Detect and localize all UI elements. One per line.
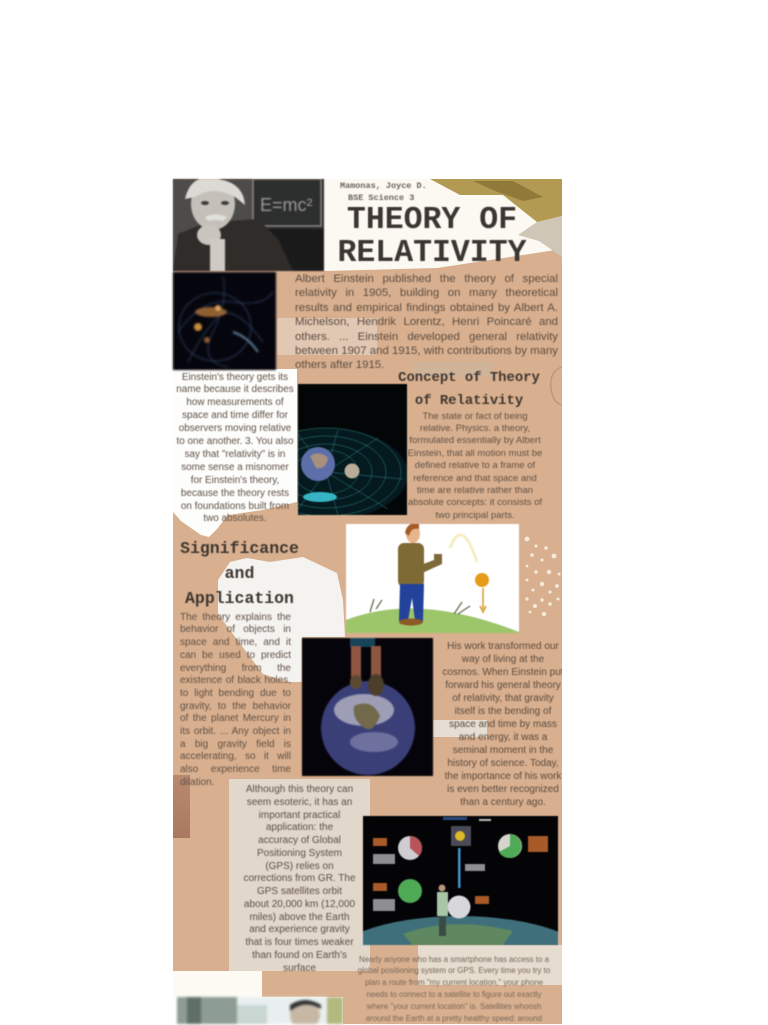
left white panel text: name because it describes (176, 384, 294, 395)
left white panel text: because the theory rests (181, 488, 289, 499)
title: THEORY OF (347, 203, 517, 238)
left white panel text: for Einstein's theory, (191, 475, 279, 486)
grey panel text: Positioning System (257, 848, 342, 859)
significance paragraph: can be used to predict (180, 650, 291, 661)
concept paragraph (408, 410, 542, 521)
significance heading: Application (185, 589, 294, 608)
left white panel text: observers moving relative (179, 423, 291, 434)
significance paragraph: also experience time (180, 764, 291, 775)
left white panel text: Einstein's theory gets its (182, 372, 288, 382)
concept paragraph: time are relative rather than (417, 485, 533, 496)
right paragraph (clipped at the poster edge): than a century ago. (460, 797, 546, 808)
grey panel text: miles) above the Earth (249, 912, 350, 922)
right paragraph (clipped at the poster edge): way of living at the (462, 654, 544, 665)
image: GPS time dilation diagram (362, 815, 559, 946)
image: man and falling ball (345, 523, 520, 634)
significance heading: and (225, 564, 254, 583)
concept paragraph: relative. Physics. a theory, (420, 423, 530, 434)
right paragraph (clipped at the poster edge): space and time by mass (449, 719, 557, 730)
GPS paragraph: needs to connect to a satellite to figure out exactly (366, 990, 542, 999)
title (337, 203, 527, 271)
grey panel text: important practical (259, 810, 340, 820)
brown strip (173, 775, 190, 838)
intro paragraph: Michelson, Hendrik Lorentz, Henri Poincaré and (295, 316, 558, 328)
small author text: Mamonas, Joyce D. (340, 181, 427, 191)
significance paragraph: dilation. (180, 777, 214, 788)
left white panel text: two absolutes. (203, 513, 267, 524)
left white panel text: how measurements of (186, 397, 284, 408)
significance paragraph (180, 612, 292, 788)
photo: Einstein with E=mc2 (172, 178, 325, 272)
grey panel text: about 20,000 km (12,000 (244, 899, 355, 910)
significance paragraph: gravity, to the behavior (180, 701, 291, 712)
GPS paragraph: plan a route from "my current location," your phone (365, 978, 543, 987)
significance paragraph: everything from the (180, 662, 291, 674)
concept paragraph: defined relative to a frame of (415, 460, 535, 471)
header torn paper (323, 179, 562, 271)
photo: person with glasses (175, 995, 344, 1025)
pale strip beside earth image (433, 720, 487, 737)
grey text panel (229, 779, 370, 971)
grey panel text (243, 784, 356, 974)
right paragraph (clipped at the poster edge): forward his general theory (445, 680, 561, 691)
poster (173, 179, 562, 1024)
right paragraph (clipped at the poster edge): cosmos. When Einstein put (442, 667, 562, 678)
significance heading (180, 538, 299, 608)
intro paragraph: others after 1915. (295, 359, 384, 371)
concept heading: Concept of Theory (398, 370, 540, 386)
intro paragraph: others. ... Einstein developed general relativity (295, 331, 558, 343)
significance paragraph: existence of black holes, (180, 675, 291, 686)
pale tape near concept heading (413, 362, 493, 377)
grey panel text: seem esoteric, it has an (247, 797, 352, 808)
concept paragraph: Einstein, that all motion must be (408, 448, 542, 459)
pale gps text panel (418, 945, 562, 985)
right paragraph (clipped at the poster edge): the importance of his work (445, 771, 561, 782)
left white panel text: to one another. 3. You also (177, 436, 293, 447)
GPS paragraph: Nearly anyone who has a smartphone has access to a (359, 954, 549, 964)
GPS paragraph: global positioning system or GPS. Every time you try to (358, 966, 550, 975)
significance paragraph: space and time, and it (180, 637, 291, 648)
white dots (524, 536, 560, 616)
pale tape behind intro (277, 318, 377, 355)
white left panel (173, 369, 297, 537)
significance paragraph: behavior of objects in (180, 624, 291, 635)
significance heading: Significance (180, 538, 299, 558)
GPS paragraph: where "your current location" is. Satellites whoosh (367, 1002, 541, 1011)
concept heading: of Relativity (415, 392, 523, 408)
photo: Einstein with E=mc2: E=mc² (260, 195, 313, 215)
grey panel text: than found on Earth's (252, 950, 347, 961)
grey panel text: accuracy of Global (258, 835, 341, 846)
intro paragraph: between 1907 and 1915, with contributions by many (295, 345, 558, 357)
left white panel text: some sense a misnomer (181, 462, 289, 473)
significance paragraph: of the planet Mercury in (180, 713, 291, 724)
right paragraph (clipped at the poster edge): itself is the bending of (455, 706, 551, 717)
left white panel text (176, 372, 294, 524)
significance paragraph: The theory explains the (180, 612, 291, 623)
significance paragraph: its orbit. ... Any object in (180, 726, 291, 737)
white bottom (173, 997, 343, 1024)
GPS paragraph (358, 954, 550, 1023)
image: earth and moon on spacetime grid (297, 383, 408, 516)
grey panel text: application: the (266, 822, 333, 833)
right paragraph (clipped at the poster edge) (442, 641, 562, 808)
image: cosmic web (171, 270, 278, 372)
grey panel text: (GPS) relies on (265, 860, 334, 872)
left white panel text: space and time differ for (182, 410, 288, 421)
grey panel text: surface (283, 962, 316, 974)
concept heading (398, 370, 540, 408)
concept paragraph: reference and that space and (413, 473, 537, 484)
grey panel text: GPS satellites orbit (257, 886, 342, 897)
significance paragraph: accelerating, so it will (180, 751, 291, 762)
right paragraph (clipped at the poster edge): and energy, it was a (459, 732, 547, 743)
grey panel text: Although this theory can (246, 784, 353, 795)
GPS paragraph: around the Earth at a pretty healthy speed: around (366, 1014, 542, 1023)
left white panel text: on foundations built from (181, 501, 289, 512)
left white panel text: say that "relativity" is in (185, 449, 285, 460)
white corner (173, 971, 262, 997)
right paragraph (clipped at the poster edge): is even better recognized (447, 784, 559, 795)
significance paragraph: a big gravity field is (180, 739, 291, 750)
right paragraph (clipped at the poster edge): of relativity, that gravity (452, 693, 554, 704)
grey panel text: and experience gravity (249, 924, 350, 935)
grey panel text: that is four times weaker (245, 937, 354, 948)
torn white paper (218, 557, 345, 682)
significance paragraph: to light bending due to (180, 688, 291, 699)
image: legs on earth (300, 636, 434, 777)
intro paragraph: Albert Einstein published the theory of special (295, 273, 558, 285)
intro paragraph: results and empirical findings obtained by Albert A. (295, 302, 558, 314)
concept paragraph: The state or fact of being (422, 410, 528, 422)
right paragraph (clipped at the poster edge): His work transformed our (447, 641, 559, 652)
grey panel text: corrections from GR. The (243, 873, 356, 884)
concept paragraph: two principal parts. (435, 510, 515, 521)
right paragraph (clipped at the poster edge): history of science. Today, (447, 758, 559, 769)
concept paragraph: formulated essentially by Albert (409, 435, 541, 446)
course text: BSE Science 3 (348, 193, 414, 203)
title: RELATIVITY (337, 236, 527, 271)
right paragraph (clipped at the poster edge): seminal moment in the (453, 745, 553, 756)
intro paragraph (294, 273, 558, 371)
intro paragraph: relativity in 1905, building on many theoretical (295, 287, 558, 299)
faint vintage sketch (550, 366, 562, 406)
concept paragraph: absolute concepts: it consists of (408, 497, 542, 508)
